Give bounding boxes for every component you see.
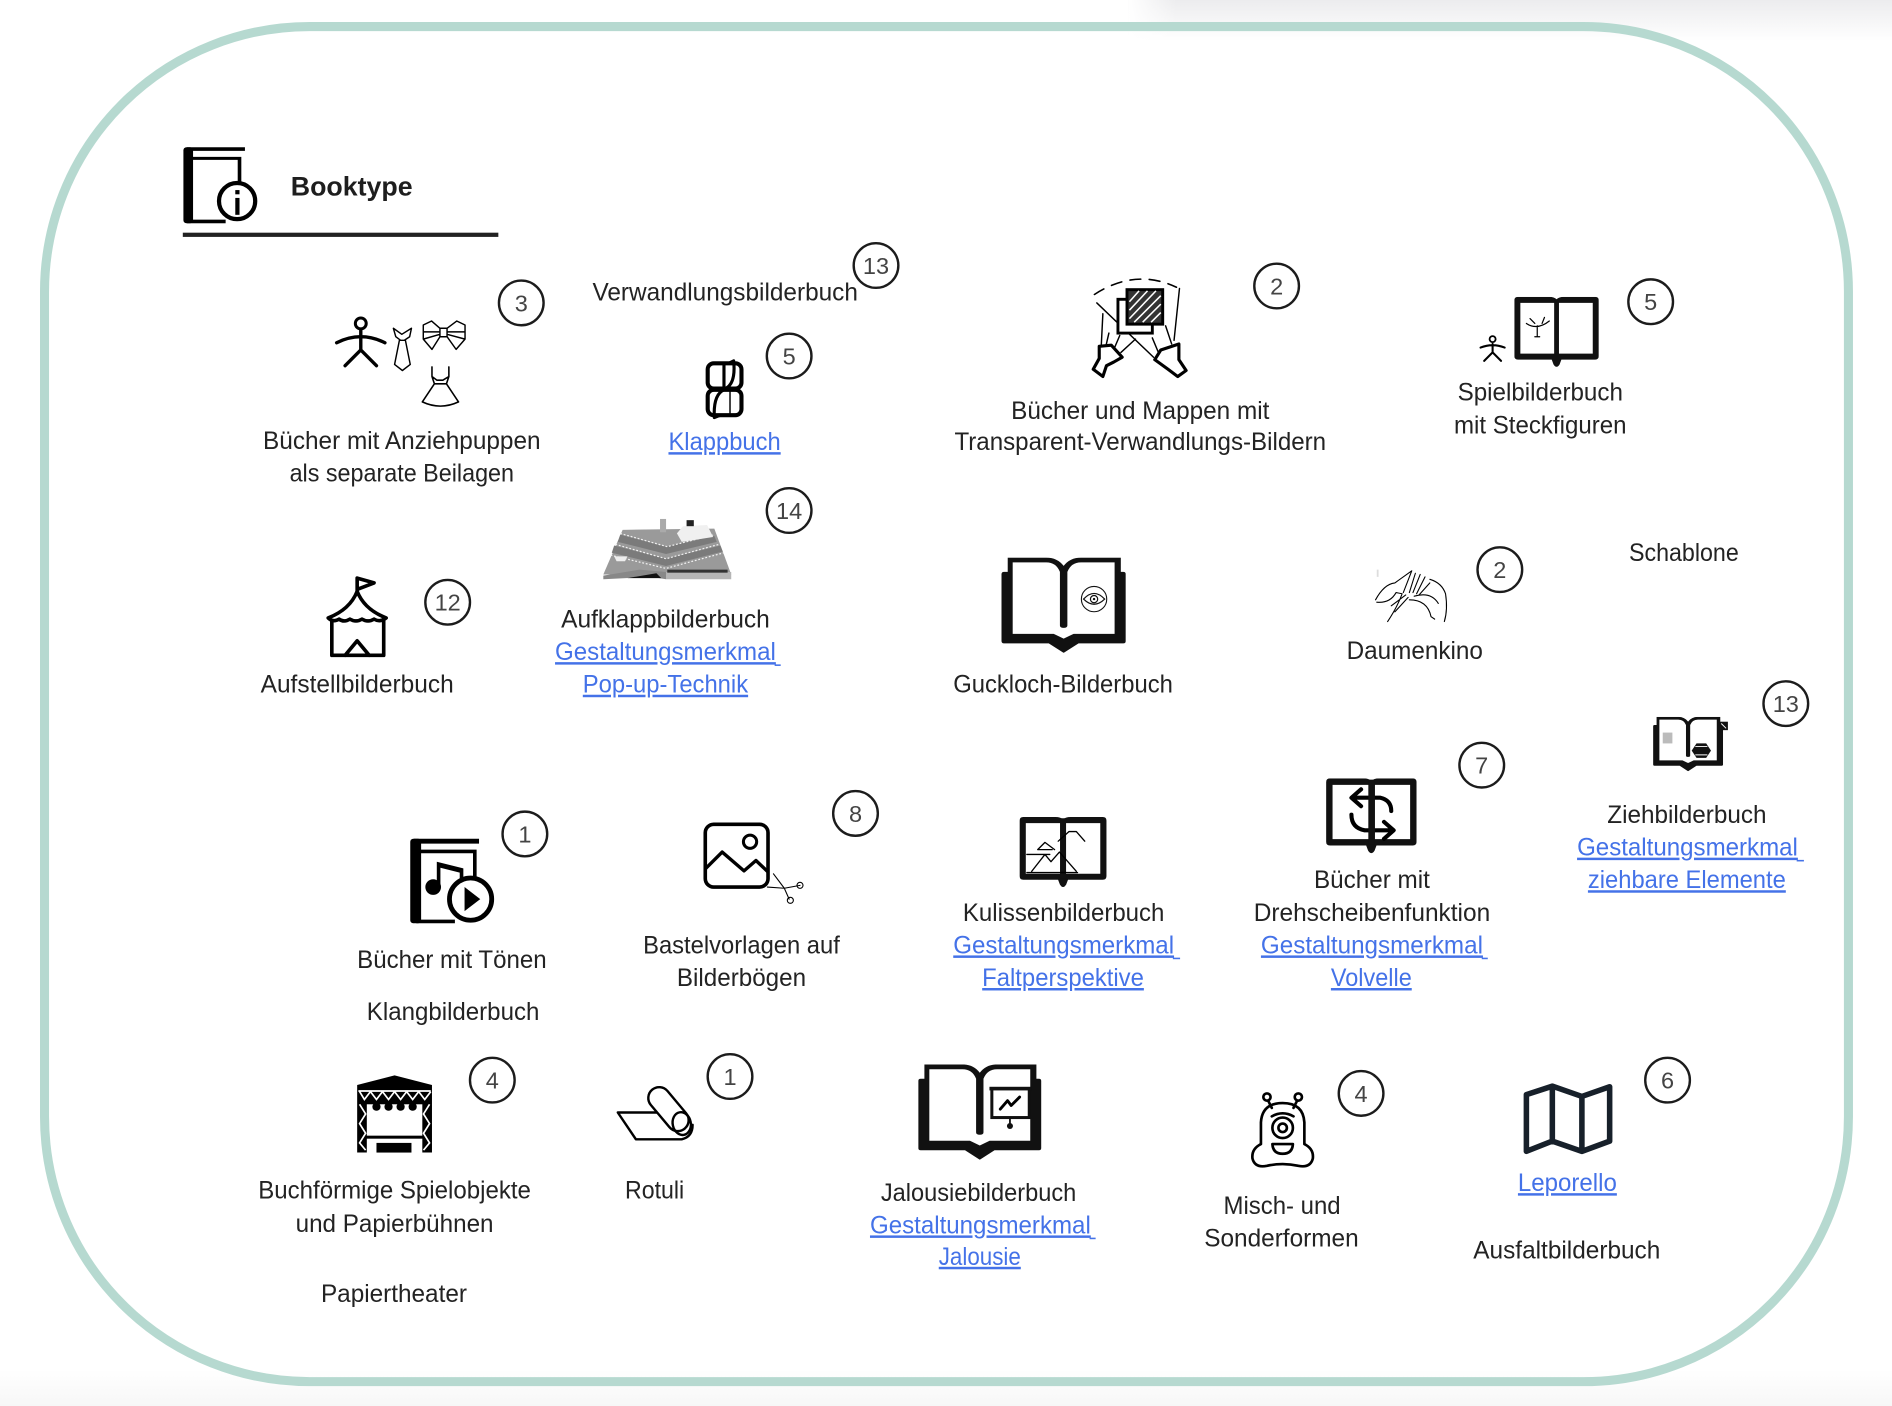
badge 4: 4 <box>1355 1081 1368 1107</box>
label <box>1454 380 1627 439</box>
item: Ziehbilderbuch <box>1577 681 1808 894</box>
badge 2: 2 <box>1493 557 1506 583</box>
item: Spielbilderbuch <box>1454 279 1673 439</box>
label: Bücher mit <box>1314 867 1430 894</box>
label: Guckloch-Bilderbuch <box>953 672 1173 699</box>
label: Bücher mit Anziehpuppen <box>263 428 541 455</box>
badge 8: 8 <box>849 801 862 827</box>
badge 1 <box>503 812 547 856</box>
badge 7: 7 <box>1475 753 1488 779</box>
item: Drehscheibenfunktion <box>1254 743 1504 992</box>
badge 5 <box>767 334 811 378</box>
badge 1: 1 <box>723 1064 737 1090</box>
label: Spielbilderbuch <box>1458 380 1623 407</box>
icon: tent <box>328 578 386 655</box>
badge 5: 5 <box>1644 289 1657 315</box>
badge 6: 6 <box>1661 1068 1674 1094</box>
item: Kulissenbilderbuch <box>953 817 1180 992</box>
item: Aufstellbilderbuch <box>261 578 470 699</box>
badge 3: 3 <box>515 290 528 316</box>
bottom shadow strip <box>0 1370 1892 1406</box>
badge 14: 14 <box>776 498 802 524</box>
label: Buchförmige Spielobjekte <box>258 1177 531 1204</box>
label <box>1577 802 1804 894</box>
item: Transparent-Verwandlungs-Bilder <box>954 264 1326 456</box>
label <box>870 1180 1096 1271</box>
label: Kulissenbilderbuch <box>963 900 1164 927</box>
icon: scroll <box>618 1083 693 1139</box>
item: Aufklappbilderbuch <box>555 488 811 699</box>
icon: open book with presentation board <box>918 1064 1041 1160</box>
label <box>954 398 1326 456</box>
icon: open book with eye <box>1002 558 1126 653</box>
item: Buchförmige Spielobjekte <box>258 1058 531 1308</box>
icon: open book with figure <box>1481 297 1599 367</box>
label: Gestaltungsmerkmal <box>1577 835 1798 862</box>
label: Klangbilderbuch <box>367 999 539 1026</box>
label: und Papierbühnen <box>296 1211 494 1238</box>
icon: hands lifting transparent sheets <box>1093 279 1186 377</box>
label: Gestaltungsmerkmal <box>555 639 776 666</box>
label: Transparent-Verwandlungs-Bildern <box>954 429 1326 456</box>
label: Aufklappbilderbuch <box>561 607 770 634</box>
icon: one-eyed monster <box>1252 1093 1313 1166</box>
label: Ziehbilderbuch <box>1607 802 1767 829</box>
item: Guckloch-Bilderbuch <box>953 558 1173 699</box>
badge 13 <box>854 243 898 288</box>
badge 5 <box>1628 279 1673 324</box>
label <box>1204 1193 1359 1253</box>
badge 4: 4 <box>486 1068 499 1094</box>
badge 7 <box>1459 743 1504 787</box>
badge 12: 12 <box>435 590 461 616</box>
label: Bücher mit Tönen <box>357 947 547 974</box>
icon: book with info <box>183 147 255 223</box>
item: Misch- und Sonderformen <box>1204 1071 1383 1253</box>
label: Sonderformen <box>1204 1226 1359 1253</box>
link label: Leporello <box>1518 1170 1617 1197</box>
icon: folded map <box>1526 1086 1610 1151</box>
icon: book with music and play <box>410 839 492 923</box>
label: ziehbare Elemente <box>1588 867 1786 894</box>
badge 6 <box>1645 1058 1690 1102</box>
label <box>258 1177 531 1308</box>
badge 4 <box>470 1058 515 1102</box>
link label: Klappbuch <box>668 429 781 456</box>
icon: folding book <box>708 361 741 418</box>
label: Gestaltungsmerkmal <box>870 1212 1091 1239</box>
item: Klappbuch <box>668 334 811 456</box>
icon: paper doll, tie, bow, dress <box>337 318 465 406</box>
label: Pop-up-Technik <box>583 672 749 699</box>
heading: Booktype <box>183 147 498 237</box>
label <box>643 932 840 992</box>
item: Bücher mit Tönen <box>357 812 547 1026</box>
icon: book with rotate arrows <box>1326 778 1417 853</box>
icon: paper stage <box>357 1075 432 1153</box>
badge 5: 5 <box>783 343 796 369</box>
badge 8 <box>833 791 878 836</box>
badge 4 <box>1339 1071 1383 1116</box>
badge 13: 13 <box>863 253 889 279</box>
icon: book with pull element <box>1653 717 1728 771</box>
item: Schablone: Schablone <box>1629 540 1739 567</box>
item: Verwandlungsbilderbuch <box>592 243 898 307</box>
badge 1 <box>708 1054 752 1099</box>
icon: pop-up book <box>603 519 731 579</box>
icon: hands flipping pages <box>1376 570 1447 622</box>
label: Gestaltungsmerkmal <box>1261 932 1483 959</box>
label: Verwandlungsbilderbuch <box>592 280 858 307</box>
label: Bücher und Mappen mit <box>1011 398 1269 425</box>
heading rule <box>183 233 498 237</box>
label: Volvelle <box>1331 965 1412 992</box>
badge 1: 1 <box>518 821 531 847</box>
label <box>357 947 547 1026</box>
label: Aufstellbilderbuch <box>261 672 454 699</box>
label: Jalousiebilderbuch <box>881 1180 1076 1207</box>
badge 13 <box>1763 681 1808 726</box>
icon: book with landscape layers <box>1020 817 1106 887</box>
label: Daumenkino <box>1347 638 1483 665</box>
label <box>1254 867 1490 992</box>
label <box>953 900 1180 992</box>
badge 14 <box>767 488 811 533</box>
label: Bilderbögen <box>677 965 806 992</box>
label: Gestaltungsmerkmal <box>953 932 1174 959</box>
item: Jalousiebilderbuch <box>870 1064 1096 1271</box>
item: Daumenkino <box>1347 547 1522 665</box>
label: Rotuli <box>625 1177 684 1204</box>
label: als separate Beilagen <box>290 461 514 488</box>
label: Drehscheibenfunktion <box>1254 900 1490 927</box>
label: Bastelvorlagen auf <box>643 932 840 959</box>
top shadow strip <box>1128 0 1892 41</box>
label <box>555 607 781 699</box>
secondary label: Ausfaltbilderbuch <box>1473 1238 1660 1265</box>
label: Papiertheater <box>321 1281 467 1308</box>
label: Faltperspektive <box>982 965 1144 992</box>
item: Leporello <box>1473 1058 1690 1265</box>
badge 2 <box>1254 264 1299 308</box>
item: Bastelvorlagen <box>643 791 878 992</box>
label: mit Steckfiguren <box>1454 412 1627 439</box>
icon: picture with scissors <box>705 824 803 903</box>
heading text: Booktype <box>291 171 413 202</box>
badge 13: 13 <box>1773 691 1799 717</box>
label <box>263 428 541 488</box>
badge 2 <box>1478 547 1522 592</box>
label: Misch- und <box>1224 1193 1341 1220</box>
item: Rotuli <box>618 1054 752 1204</box>
label: Jalousie <box>939 1244 1021 1271</box>
badge 2: 2 <box>1270 273 1283 299</box>
badge 12 <box>425 580 470 625</box>
item: Bücher mit Anziehpuppen <box>263 281 544 488</box>
badge 3 <box>499 281 544 325</box>
